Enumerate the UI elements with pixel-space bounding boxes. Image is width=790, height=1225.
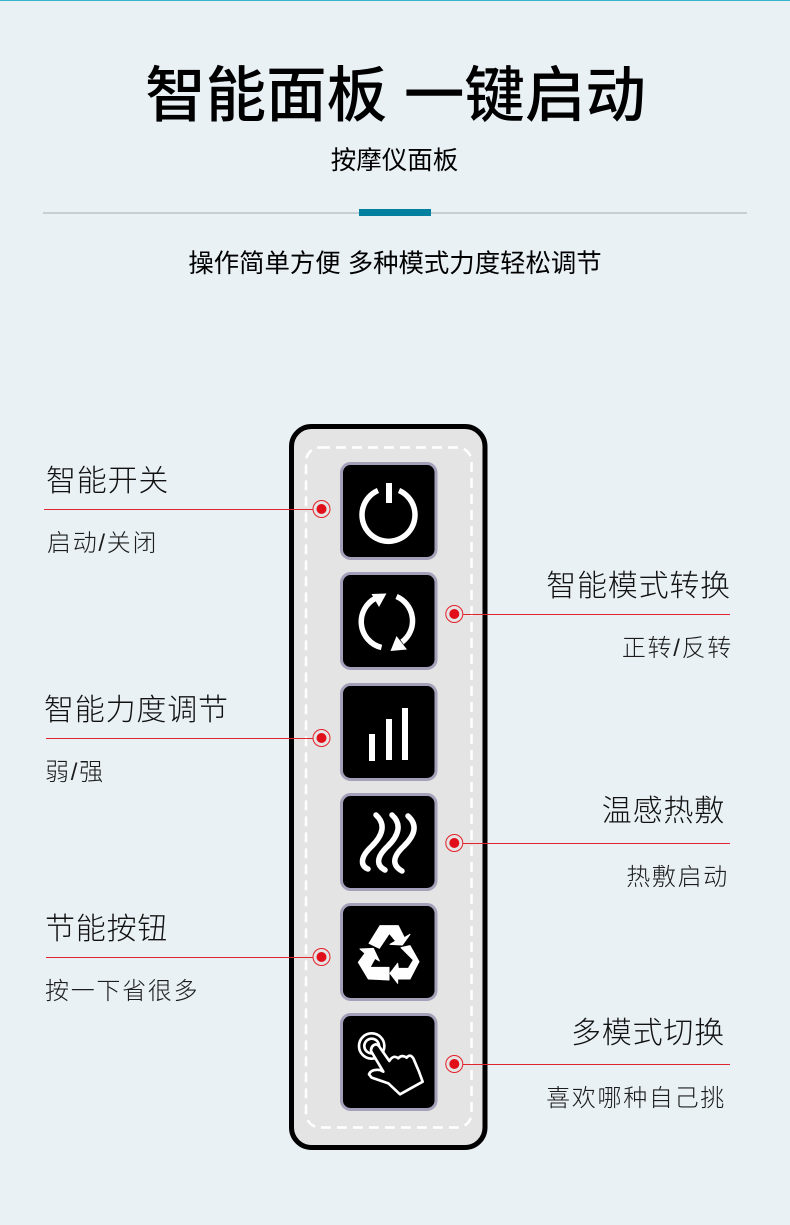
button: power bbox=[342, 464, 436, 558]
callout: energy saving bbox=[45, 913, 330, 1005]
callout: mode switch: 正转/反转 bbox=[622, 635, 733, 662]
callout: intensity: 智能力度调节 bbox=[44, 694, 229, 727]
panel: control panel body bbox=[292, 426, 485, 1148]
callout: multi mode: 喜欢哪种自己挑 bbox=[546, 1085, 726, 1112]
button: intensity bars bbox=[342, 684, 436, 780]
button: rotation mode bbox=[342, 574, 436, 668]
callout: multi mode bbox=[446, 1017, 730, 1112]
callout: heat: 热敷启动 bbox=[626, 864, 729, 891]
callout: smart switch: 智能开关 bbox=[46, 465, 169, 498]
callout: intensity bbox=[44, 694, 330, 786]
callout: mode switch: 智能模式转换 bbox=[546, 570, 731, 603]
button: heat bbox=[342, 794, 436, 890]
button: recycle bbox=[342, 904, 436, 1000]
callout: intensity: 弱/强 bbox=[45, 759, 105, 786]
callout: heat bbox=[446, 795, 730, 891]
title: 智能面板 一键启动 bbox=[145, 61, 646, 129]
divider with accent bbox=[43, 209, 747, 216]
callout: energy saving: 节能按钮 bbox=[45, 913, 168, 946]
callout: mode switch bbox=[446, 570, 733, 662]
callout: smart switch bbox=[44, 465, 330, 557]
subtitle: 按摩仪面板 bbox=[331, 147, 458, 175]
callout: smart switch: 启动/关闭 bbox=[47, 530, 158, 557]
description text: 操作简单方便 多种模式力度轻松调节 bbox=[188, 250, 602, 278]
callout: heat: 温感热敷 bbox=[602, 795, 725, 828]
callout: energy saving: 按一下省很多 bbox=[45, 978, 199, 1005]
callout: multi mode: 多模式切换 bbox=[571, 1017, 725, 1050]
button: touch hand bbox=[342, 1014, 436, 1110]
